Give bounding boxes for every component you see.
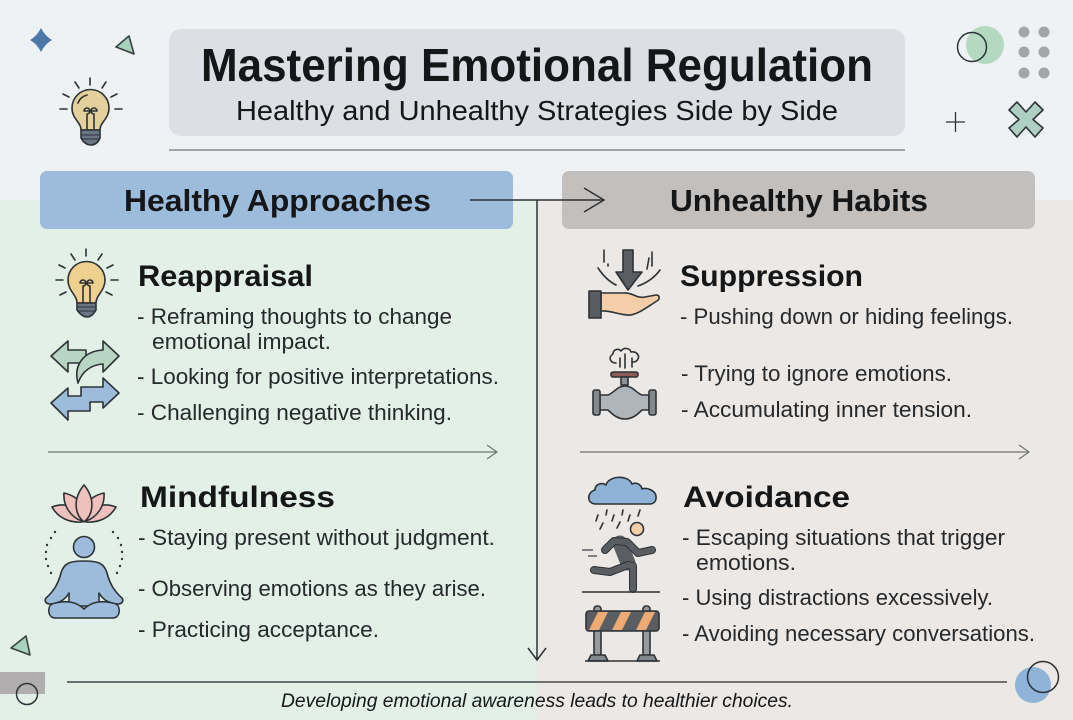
footer caption: Developing emotional awareness leads to healthier choices.: [281, 691, 793, 712]
heading: avoidance: Avoidance: [683, 481, 850, 514]
icon: barrier: [585, 606, 660, 661]
panel header: unhealthy habits: Unhealthy Habits: [670, 183, 928, 218]
panel: healthy approaches: [45, 249, 499, 642]
panel: unhealthy habits: [580, 250, 1035, 661]
icon: blue sparkle: [30, 28, 52, 52]
icon: green triangle: [116, 36, 134, 54]
heading: mindfulness: Mindfulness: [140, 481, 335, 514]
text: avoidance points: [682, 525, 1035, 646]
icon: running person: [582, 522, 660, 592]
icon: suppression hand and arrow: [589, 250, 660, 318]
icon: dot grid: [1018, 26, 1050, 78]
icon: meditating person: [45, 531, 123, 618]
text: mindfulness points: [138, 525, 495, 642]
text: suppression points: - Trying to ignore emotions.: [681, 361, 952, 386]
icon: lotus: [52, 485, 116, 522]
panel header: unhealthy habits: [562, 171, 1035, 229]
icon: plus: [946, 112, 965, 132]
text: reappraisal points: - Challenging negative thinking.: [137, 400, 452, 425]
icon: bottom-left triangle: [11, 636, 30, 655]
icon: green and outlined circles: [958, 26, 1004, 64]
text: suppression points: [680, 304, 1013, 422]
text: reappraisal points: emotional impact.: [152, 329, 331, 354]
arrow: unhealthy divider: [580, 445, 1029, 459]
text: mindfulness points: - Staying present without judgment.: [138, 525, 495, 550]
panel header: healthy approaches: [40, 171, 513, 229]
subtitle: Healthy and Unhealthy Strategies Side by Side: [236, 95, 838, 126]
text: suppression points: - Accumulating inner tension.: [681, 397, 972, 422]
arrow: healthy divider: [48, 445, 497, 459]
text: avoidance points: emotions.: [696, 550, 796, 575]
text: avoidance points: - Avoiding necessary conversations.: [682, 621, 1035, 646]
text: mindfulness points: - Practicing acceptance.: [138, 617, 379, 642]
text: reappraisal points: [137, 304, 499, 425]
arrow: vertical connector: [528, 200, 546, 660]
text: suppression points: - Pushing down or hiding feelings.: [680, 304, 1013, 329]
icon: reappraisal bulb: [56, 249, 118, 317]
text: mindfulness points: - Observing emotions as they arise.: [138, 576, 486, 601]
heading: suppression: Suppression: [680, 260, 863, 293]
icon: steam valve: [593, 348, 656, 419]
text: avoidance points: - Using distractions excessively.: [682, 585, 993, 610]
arrow: horizontal connector: [470, 188, 604, 212]
icon: top light bulb: [60, 78, 122, 145]
text: avoidance points: - Escaping situations that trigger: [682, 525, 1005, 550]
text: reappraisal points: - Reframing thoughts to change: [137, 304, 452, 329]
icon: bottom-left bar and circle: [0, 672, 45, 704]
text: reappraisal points: - Looking for positive interpretations.: [137, 364, 499, 389]
icon: reframing arrows: [51, 341, 119, 420]
title banner: [169, 29, 905, 136]
icon: rain cloud: [589, 477, 656, 529]
heading: reappraisal: Reappraisal: [138, 260, 313, 293]
panel header: healthy approaches: Healthy Approaches: [124, 183, 431, 218]
icon: green cross: [1009, 102, 1043, 137]
title: Mastering Emotional Regulation: [201, 39, 873, 91]
icon: bottom-right circles: [1015, 662, 1058, 703]
